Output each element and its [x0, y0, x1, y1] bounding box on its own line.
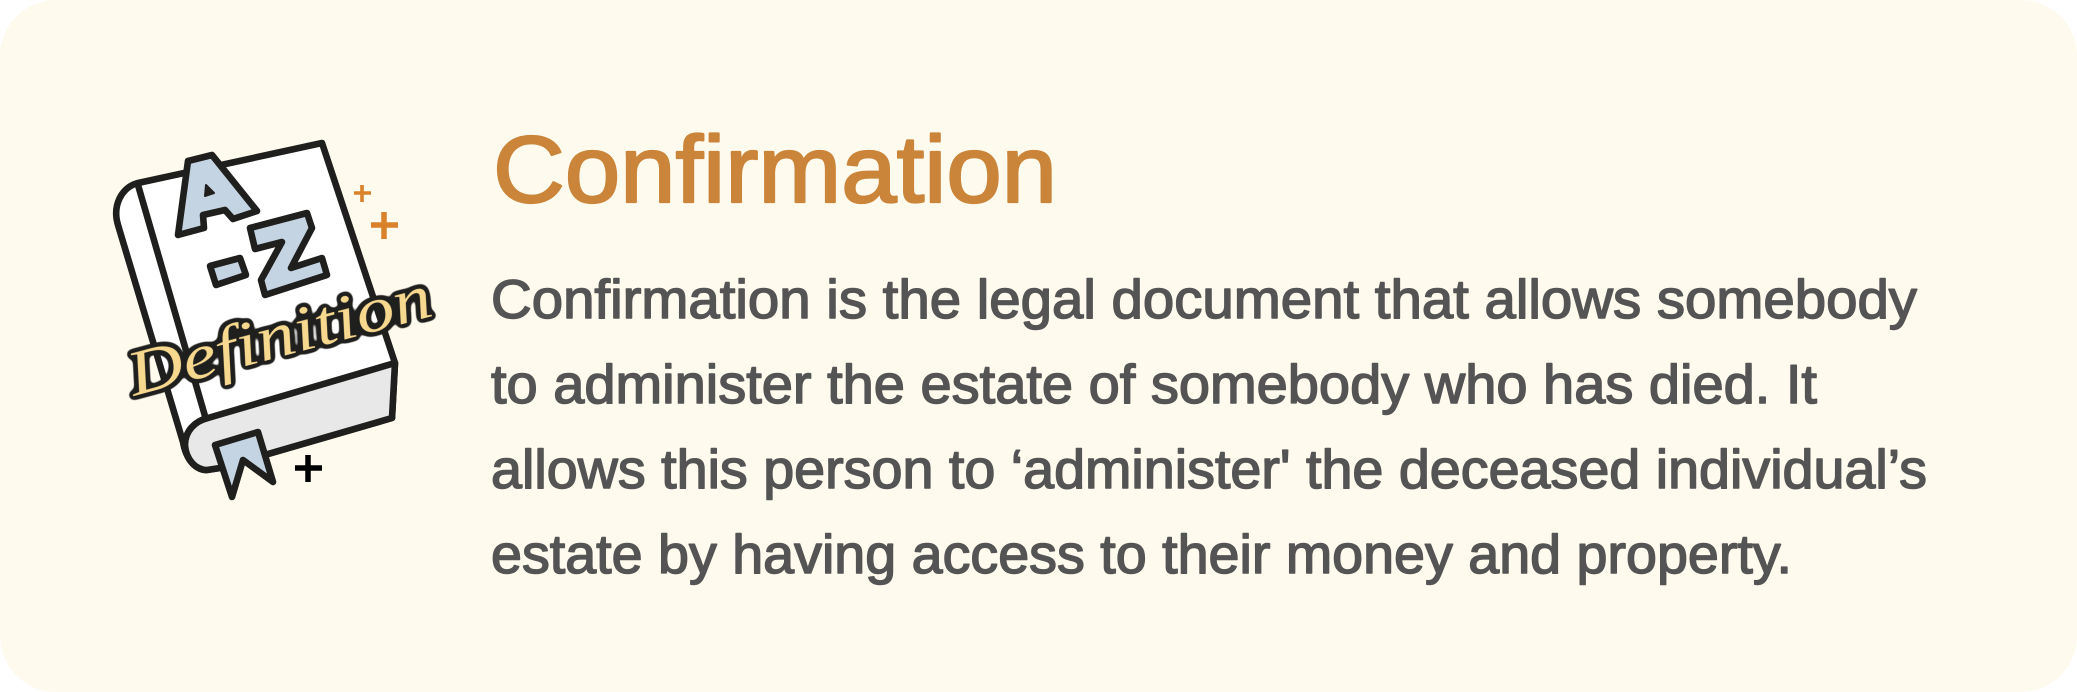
definition body text	[491, 268, 1927, 585]
bookmark ribbon	[215, 432, 273, 497]
sparkle: small orange plus	[354, 185, 371, 202]
sparkle: large orange plus	[371, 212, 398, 239]
icon: definition book	[116, 143, 439, 497]
banner word: Definition: Definition	[118, 260, 439, 410]
dash between letters	[210, 258, 246, 285]
letter Z	[250, 213, 327, 295]
body line 4: estate by having access to their money and property.	[491, 523, 1792, 585]
body line 2: to administer the estate of somebody who has died. It	[491, 353, 1817, 415]
body line 1: Confirmation is the legal document that allows somebody	[491, 268, 1918, 330]
sparkle: black plus	[295, 455, 322, 482]
book cover and page face	[116, 143, 395, 470]
letter A	[178, 155, 257, 235]
heading: Confirmation	[493, 117, 1057, 223]
book page block	[185, 363, 395, 470]
body line 3: allows this person to ‘administer' the deceased individual’s	[491, 438, 1927, 500]
book spine line	[138, 185, 205, 416]
letter A counter	[205, 185, 214, 196]
